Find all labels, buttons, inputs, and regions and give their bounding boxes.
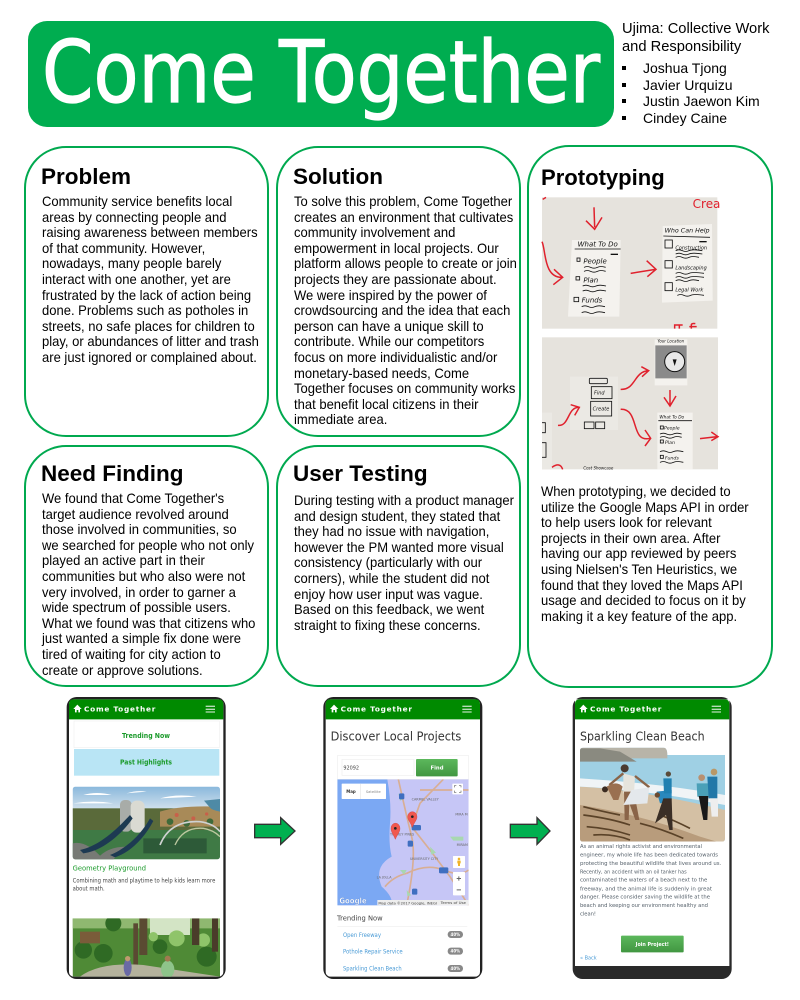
- panel: problem: [24, 146, 269, 437]
- map: MIRA M: [455, 813, 468, 817]
- text: need finding: those involved in communities, so: [42, 521, 237, 537]
- text: solution: focus on more individualistic and/or: [294, 349, 497, 365]
- screen 2: discover local projects: Come Together: [341, 704, 412, 713]
- text: need finding: just wanted a simple fix done were: [42, 630, 241, 646]
- text: problem: areas by connecting people and: [42, 209, 227, 225]
- text: solution: that benefit local citizens in their: [294, 396, 478, 412]
- screen 2: discover local projects: 92092: [343, 765, 359, 771]
- text: user testing: consistency (particularly with our: [294, 554, 482, 570]
- text: user testing: however the PM wanted more visual: [294, 539, 504, 555]
- panel: need finding: [24, 445, 269, 687]
- map: Satellite: [366, 790, 382, 794]
- sketch photo: what to do and who can help: Construction: [675, 245, 707, 251]
- sketch photo: find and create flow: Cost Showcase: [583, 465, 614, 470]
- text: problem: done. Problems such as potholes in: [42, 302, 248, 318]
- heading: prototyping: Prototyping: [541, 165, 665, 190]
- screen 2: discover local projects: 40%: [451, 932, 460, 937]
- sketch photo: what to do and who can help: People: [583, 257, 607, 265]
- arrow 2: [510, 818, 550, 844]
- text: user testing: they had no issue with navigation,: [294, 523, 489, 539]
- screen 3: project details: Sparkling Clean Beach: [580, 729, 705, 744]
- sketch photo: find and create flow: People: [664, 426, 680, 432]
- project description: freeway, and the animal life is suddenly in great: [580, 886, 713, 892]
- text: problem: nowadays, many people barely: [42, 255, 221, 271]
- project description: beach and keeping our environment healthy and: [580, 903, 708, 909]
- sketch photo: what to do and who can help: Plan: [583, 277, 598, 285]
- text: user testing: During testing with a product manager: [294, 492, 514, 508]
- text: user testing: [294, 492, 514, 633]
- text: prototyping: making it a key feature of the app.: [541, 608, 737, 624]
- text: solution: We were inspired by the power of: [294, 287, 487, 303]
- search form: [337, 756, 469, 779]
- screen 3: project details: « Back: [580, 955, 598, 961]
- screen 3: project details: Come Together: [590, 704, 662, 713]
- text: solution: projects they are passionate about.: [294, 271, 497, 287]
- screen 2: discover local projects: Find: [430, 765, 444, 771]
- map: MIRAM: [457, 843, 468, 847]
- text: problem: [42, 193, 259, 365]
- text: user testing: and design student, they stated that: [294, 508, 500, 524]
- map: [337, 779, 469, 905]
- text: user testing: Based on this feedback, we went: [294, 601, 484, 617]
- text: prototyping: usage and decided to focus on it by: [541, 592, 746, 608]
- map: UNIVERSITY CITY: [410, 857, 439, 861]
- team and principle: Ujima: Collective Work: [622, 21, 769, 37]
- map: Terms of Use: [440, 901, 467, 905]
- text: need finding: played an active part in their: [42, 552, 205, 568]
- text: user testing: straight to fixing these concerns.: [294, 617, 481, 633]
- people: [623, 773, 635, 793]
- photo: beach cleanup: [580, 748, 725, 842]
- text: problem: play, or abundances of litter and trash: [42, 333, 259, 349]
- text: solution: immediate area.: [294, 411, 387, 427]
- text: solution: Together focuses on community works: [294, 380, 515, 396]
- sketch photo: find and create flow: Your Location: [657, 339, 685, 344]
- team and principle: [622, 21, 770, 126]
- sketch photo: find and create flow: Create: [593, 406, 609, 412]
- heading: need finding: Need Finding: [41, 461, 184, 486]
- text: prototyping: When prototyping, we decided to: [541, 483, 731, 499]
- text: solution: monetary-based needs, Come: [294, 365, 469, 381]
- text: prototyping: found that they loved the Maps API: [541, 577, 743, 593]
- screen 1: home feed: Trending Now: [122, 732, 170, 740]
- screen 3: project details: Join Project!: [635, 942, 669, 948]
- screen 2: discover local projects: Pothole Repair Service: [343, 949, 403, 956]
- map: LA JOLLA: [377, 876, 392, 880]
- text: solution: empowerment in local projects. Our: [294, 240, 499, 256]
- screen 1: home feed: Past Highlights: [120, 759, 172, 767]
- text: prototyping: using Nielsen's Ten Heuristics, we: [541, 561, 737, 577]
- heading: problem: Problem: [41, 164, 131, 189]
- text: solution: crowdsourcing and the idea that each: [294, 302, 510, 318]
- screen 2: discover local projects: [323, 697, 482, 979]
- text: need finding: communities but who also were not: [42, 568, 245, 584]
- photo: garden: [73, 915, 220, 978]
- team and principle: Justin Jaewon Kim: [643, 93, 760, 109]
- project description: [580, 844, 722, 917]
- text: prototyping: [541, 483, 749, 624]
- project description: danger. Please consider saving the wildlife at the: [580, 895, 710, 901]
- screen 1: home feed: Combining math and playtime to help kids learn more: [73, 877, 216, 884]
- text: prototyping: utilize the Google Maps API in order: [541, 499, 749, 515]
- screen 1: home feed: about math.: [73, 885, 105, 892]
- sketch photo: what to do and who can help: Landscaping: [675, 265, 707, 271]
- text: need finding: target audience revolved around: [42, 506, 229, 522]
- text: user testing: enjoy how user input was vague.: [294, 586, 483, 602]
- screen 1: home feed: [67, 697, 226, 979]
- text: solution: contribute. While our competitors: [294, 333, 484, 349]
- screen 2: discover local projects: 40%: [451, 966, 460, 971]
- team and principle: Cindey Caine: [643, 110, 727, 126]
- sketch photo: find and create flow: What To Do: [659, 415, 685, 421]
- text: solution: person can have a unique skill to: [294, 318, 484, 334]
- heading: user testing: User Testing: [293, 461, 428, 486]
- map: CARMEL VALLEY: [412, 797, 440, 801]
- panel: prototyping: [527, 145, 773, 688]
- text: problem: are just ignored or complained about.: [42, 349, 257, 365]
- map: Map data ©2017 Google, INEGI: [378, 901, 437, 905]
- sketch photo: what to do and who can help: Who Can Help: [665, 228, 710, 235]
- icon: menu: [206, 706, 215, 713]
- screen 3: project details: [573, 697, 732, 979]
- map: Map: [346, 789, 356, 794]
- text: need finding: [42, 490, 255, 678]
- project description: contaminated the waters of a beach next to the: [580, 878, 708, 884]
- project description: engineer, my whole life has been dedicated towards: [580, 853, 718, 859]
- sketch photo: what to do and who can help: Legal Work: [675, 287, 704, 293]
- text: problem: interact with one another, yet are: [42, 271, 231, 287]
- screen 2: discover local projects: Discover Local Projects: [331, 729, 461, 744]
- text: prototyping: projects in their own area. After: [541, 530, 720, 546]
- panel: solution: [276, 146, 521, 437]
- text: problem: of that community. However,: [42, 240, 205, 256]
- project description: protecting the beautiful wildlife that lives around us.: [580, 861, 722, 867]
- text: need finding: create or approve solutions.: [42, 662, 203, 678]
- text: prototyping: to help users look for relevant: [541, 514, 712, 530]
- text: solution: To solve this problem, Come Together: [294, 193, 512, 209]
- text: solution: platform allows people to create or join: [294, 255, 517, 271]
- prototype sketches and app screens: [66, 196, 732, 979]
- text: solution: community involvement and: [294, 224, 455, 240]
- screen 2: discover local projects: 40%: [451, 949, 460, 954]
- sketch photo: find and create flow: Find: [594, 390, 605, 396]
- text: problem: raising awareness between members: [42, 224, 258, 240]
- team and principle: Joshua Tjong: [643, 60, 727, 76]
- project description: As an animal rights activist and environmental: [580, 844, 702, 850]
- icon: home: [73, 705, 82, 712]
- sketch photo: what to do and who can help: Crea: [693, 197, 720, 211]
- panel: user testing: [276, 445, 521, 687]
- text: solution: [294, 193, 517, 427]
- screen 2: discover local projects: Open Freeway: [343, 932, 381, 939]
- text: prototyping: having our app reviewed by peers: [541, 545, 736, 561]
- project description: clean!: [580, 911, 596, 917]
- text: problem: Community service benefits local: [42, 193, 232, 209]
- text: solution: creates an environment that cultivates: [294, 209, 513, 225]
- map: Google: [339, 895, 367, 905]
- text: problem: frustrated by the lack of action being: [42, 287, 251, 303]
- team and principle: and Responsibility: [622, 39, 741, 55]
- text: need finding: What we found was that citizens who: [42, 615, 255, 631]
- text: user testing: corners), while the student did not: [294, 570, 489, 586]
- join button: [621, 936, 684, 952]
- sketch photo: what to do and who can help: [542, 197, 720, 329]
- screen 1: home feed: Geometry Playground: [73, 863, 146, 872]
- map pins: [408, 812, 417, 827]
- sketch photo: find and create flow: Funds: [665, 455, 679, 461]
- team and principle: Javier Urquizu: [643, 76, 732, 92]
- trending list: Trending Now: [336, 914, 383, 922]
- text: need finding: very involved, in order to garner a: [42, 584, 236, 600]
- screen 2: discover local projects: Sparkling Clean Beach: [343, 966, 402, 973]
- text: need finding: wide spectrum of possible users.: [42, 599, 231, 615]
- sketch photo: what to do and who can help: Funds: [582, 297, 603, 305]
- heading: solution: Solution: [293, 164, 383, 189]
- text: problem: streets, no safe places for children to: [42, 318, 255, 334]
- arrow 1: [255, 818, 295, 844]
- text: need finding: We found that Come Together's: [42, 490, 224, 506]
- map: TORREY PINES: [389, 832, 414, 836]
- sketch photo: what to do and who can help: What To Do: [578, 241, 618, 249]
- sketch photo: find and create flow: Plan: [665, 440, 675, 446]
- text: need finding: tired of waiting for city action to: [42, 646, 221, 662]
- text: need finding: we searched for people who not only: [42, 537, 254, 553]
- project description: Recently, an accident with an oil tanker has: [580, 869, 687, 875]
- sketch photo: find and create flow: [542, 337, 718, 470]
- photo: geometry playground: [73, 787, 220, 859]
- screen 1: home feed: Come Together: [84, 704, 156, 713]
